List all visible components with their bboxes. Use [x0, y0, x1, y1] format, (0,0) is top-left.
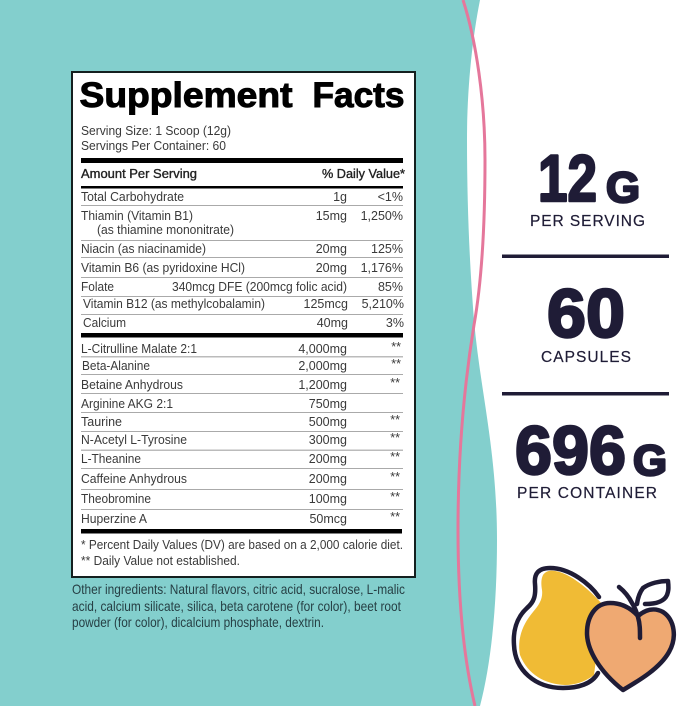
vitamins and minerals rows: Folate [81, 280, 114, 294]
footnotes [81, 538, 403, 568]
other ingredients text: powder (for color), dicalcium phosphate, dextrin. [72, 614, 324, 630]
other ingredients rows: ** [390, 490, 400, 504]
stat: 696 g per container: G [633, 437, 667, 485]
icon: pear and peach [514, 568, 674, 690]
stat: 12 g per serving: G [606, 164, 640, 212]
other ingredients rows: 300mg [309, 433, 347, 447]
vitamins and minerals rows: Vitamin B12 (as methylcobalamin) [83, 297, 265, 311]
other ingredients rows: ** [390, 450, 400, 464]
vitamins and minerals rows: Thiamin (Vitamin B1) [81, 209, 193, 223]
vitamins and minerals rows: Total Carbohydrate [81, 190, 184, 204]
other ingredients rows: N-Acetyl L-Tyrosine [81, 433, 187, 447]
other ingredients rows: 4,000mg [298, 342, 347, 356]
vitamins and minerals rows: 1,250% [361, 209, 403, 223]
vitamins and minerals rows: Vitamin B6 (as pyridoxine HCl) [81, 261, 245, 275]
other ingredients rows: Theobromine [81, 492, 151, 506]
stat: 12 g per serving: 12 [538, 141, 597, 215]
other ingredients rows: ** [391, 357, 401, 371]
other ingredients rows: ** [390, 376, 400, 390]
other ingredients rows: Betaine Anhydrous [81, 378, 183, 392]
vitamins and minerals rows: 1,176% [361, 261, 403, 275]
table header: % Daily Value* [322, 167, 405, 181]
vitamins and minerals rows: 340mcg DFE (200mcg folic acid) [172, 280, 347, 294]
vitamins and minerals rows: 1g [333, 190, 347, 204]
other ingredients rows: 750mg [309, 397, 347, 411]
other ingredients text: acid, calcium silicate, silica, beta carotene (for color), beet root [72, 598, 401, 614]
vitamins and minerals rows: 3% [386, 316, 404, 330]
footnotes: ** Daily Value not established. [81, 554, 240, 568]
vitamins and minerals rows: Calcium [83, 316, 126, 330]
other ingredients rows: 100mg [309, 492, 347, 506]
table header [81, 158, 405, 188]
stat: 60 capsules: CAPSULES [541, 349, 631, 366]
other ingredients rows: Arginine AKG 2:1 [81, 397, 173, 411]
other ingredients rows: 50mcg [309, 512, 347, 526]
heading: Supplement Facts: Supplement [80, 76, 293, 115]
stat: 12 g per serving [530, 141, 645, 230]
table header: Amount Per Serving [81, 167, 197, 181]
vitamins and minerals rows: 125mcg [304, 297, 348, 311]
stat: 60 capsules: 60 [547, 275, 625, 352]
other ingredients rows: 2,000mg [298, 359, 347, 373]
other ingredients rows: Huperzine A [81, 512, 148, 526]
peach [587, 603, 674, 690]
vitamins and minerals rows: 5,210% [362, 297, 404, 311]
vitamins and minerals rows: Niacin (as niacinamide) [81, 242, 206, 256]
vitamins and minerals rows [81, 190, 404, 330]
vitamins and minerals rows: 15mg [316, 209, 347, 223]
vitamins and minerals rows: <1% [378, 190, 403, 204]
other ingredients rows: 500mg [309, 415, 347, 429]
other ingredients rows: L-Theanine [81, 452, 141, 466]
stat: 696 g per container [515, 412, 667, 502]
other ingredients rows [81, 340, 403, 526]
other ingredients rows: ** [391, 340, 401, 354]
heading: Supplement Facts [80, 76, 404, 115]
other ingredients text: Other ingredients: Natural flavors, citric acid, sucralose, L-malic [72, 581, 405, 597]
other ingredients rows: Taurine [81, 415, 122, 429]
serving information: Serving Size: 1 Scoop (12g) [81, 124, 231, 138]
serving information: Servings Per Container: 60 [81, 139, 226, 153]
serving information [81, 124, 231, 153]
other ingredients rows: ** [390, 431, 400, 445]
other ingredients rows: Beta-Alanine [82, 359, 150, 373]
footnotes: * Percent Daily Values (DV) are based on a 2,000 calorie diet. [81, 538, 403, 552]
vitamins and minerals rows: 85% [378, 280, 403, 294]
teal background wave [0, 0, 497, 706]
pear fill [519, 571, 603, 685]
other ingredients rows: 1,200mg [298, 378, 347, 392]
other ingredients rows: 200mg [309, 472, 347, 486]
peach cleft, stem and leaf [619, 581, 668, 638]
other ingredients rows: 200mg [309, 452, 347, 466]
pink wave line [458, 0, 485, 706]
stat: 12 g per serving: PER SERVING [530, 213, 645, 230]
vitamins and minerals rows: 125% [371, 242, 403, 256]
other ingredients rows: ** [390, 510, 400, 524]
stat: 696 g per container: 696 [515, 412, 626, 489]
vitamins and minerals rows: 20mg [316, 242, 347, 256]
heading: Supplement Facts: Facts [312, 76, 404, 115]
stat: 696 g per container: PER CONTAINER [517, 485, 657, 502]
other ingredients rows: L-Citrulline Malate 2:1 [81, 342, 197, 356]
other ingredients rows: ** [390, 413, 400, 427]
vitamins and minerals rows: 40mg [317, 316, 348, 330]
pear outline [514, 568, 599, 688]
other ingredients rows: Caffeine Anhydrous [81, 472, 187, 486]
panel: supplement facts table [72, 72, 415, 577]
other ingredients text [72, 581, 405, 630]
other ingredients rows: ** [390, 470, 400, 484]
vitamins and minerals rows: (as thiamine mononitrate) [97, 223, 234, 237]
vitamins and minerals rows: 20mg [316, 261, 347, 275]
